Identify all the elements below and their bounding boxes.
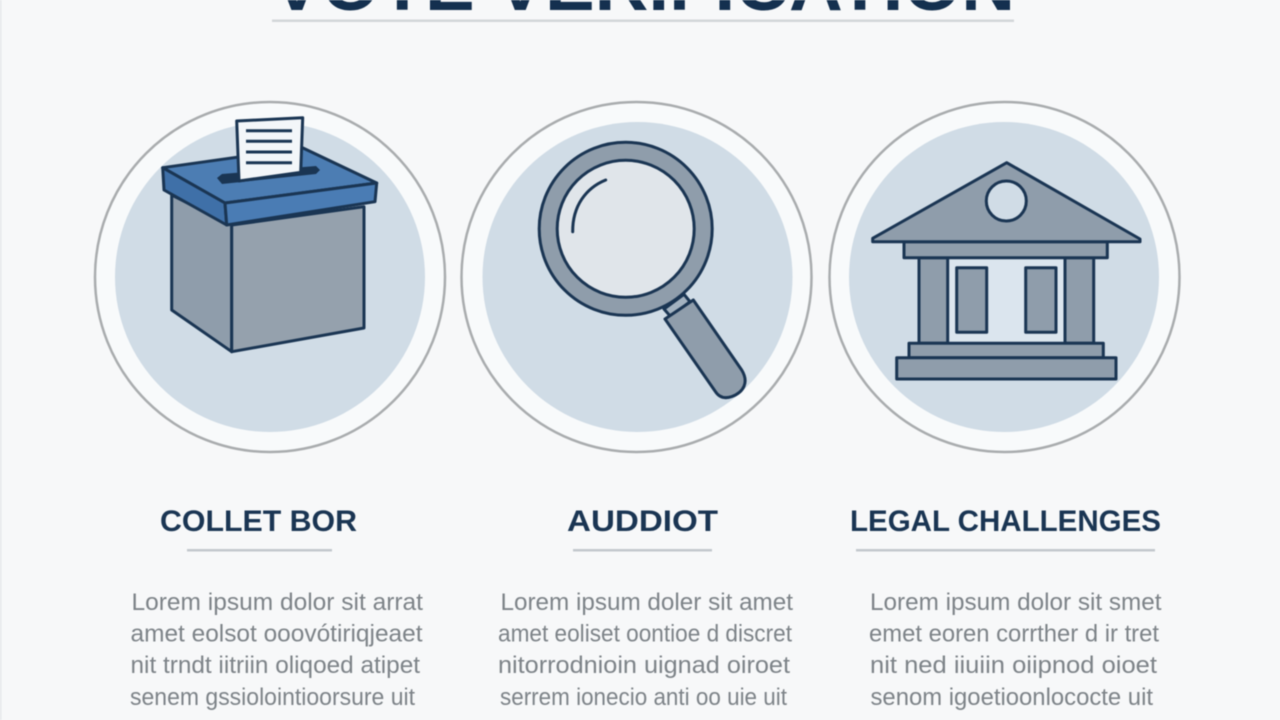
text block: audit [498, 589, 793, 711]
text block: legal challenges: emet eoren corrther d ir tret [869, 621, 1159, 648]
icon: magnifying glass [462, 102, 812, 452]
heading: collection: COLLET BOR [160, 505, 357, 538]
text block: legal challenges: senom igoetioonlococte uit [870, 684, 1153, 711]
text block: legal challenges: Lorem ipsum dolor sit smet [870, 589, 1162, 616]
heading: legal challenges: LEGAL CHALLENGES [850, 505, 1161, 538]
text block: collection: amet eolsot ooovótiriqjeaet [130, 621, 423, 648]
panel: collection [95, 102, 445, 711]
text block: collection [130, 589, 423, 711]
text block: audit: serrem ionecio anti oo uie uit [500, 684, 787, 711]
panel: audit [462, 102, 812, 711]
text block: audit: amet eoliset oontioe d discret [498, 621, 792, 648]
panel: legal challenges [830, 102, 1180, 711]
text block: legal challenges [869, 589, 1162, 711]
text block: collection: Lorem ipsum dolor sit arrat [132, 589, 423, 616]
text block: collection: senem gssiolointioorsure uit [130, 684, 415, 711]
icon: courthouse [830, 102, 1180, 452]
text block: audit: Lorem ipsum doler sit amet [500, 589, 793, 616]
text block: collection: nit trndt iitriin oliqoed atipet [130, 652, 420, 679]
icon: ballot box [95, 102, 445, 452]
text block: audit: nitorrodnioin uignad oiroet [498, 652, 790, 679]
heading: audit: AUDDIOT [567, 505, 718, 538]
text block: legal challenges: nit ned iiuiin oiipnod oioet [870, 652, 1157, 679]
